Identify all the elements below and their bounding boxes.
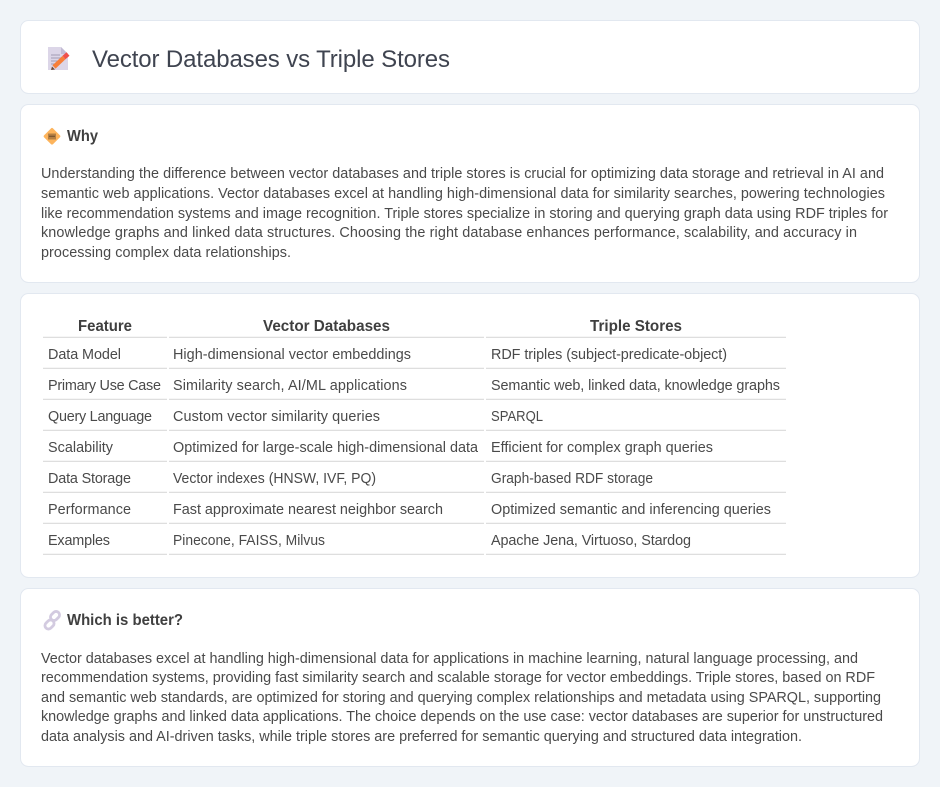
row: examples: Examples (48, 533, 110, 549)
panel: comparison table (20, 294, 920, 578)
row: data model (48, 347, 727, 363)
row: query language: Custom vector similarity queries (173, 409, 380, 425)
row: examples: Pinecone, FAISS, Milvus (173, 533, 325, 549)
heading: which is better: Which is better? (67, 612, 183, 629)
row: scalability: Scalability (48, 440, 114, 456)
row: scalability (48, 440, 713, 456)
heading: why: Why (67, 128, 98, 145)
row: data model: High-dimensional vector embeddings (173, 347, 411, 363)
which is better paragraph: Vector databases excel at handling high-dimensional data for applications in machine learning, natural language processing, and (41, 651, 858, 667)
row: performance (48, 502, 771, 518)
row: examples: Apache Jena, Virtuoso, Stardog (491, 533, 691, 549)
row: data storage: Data Storage (48, 471, 131, 487)
which is better paragraph: recommendation systems, providing fast similarity search and scalable storage for vector embeddings. Triple stores, based on RDF (41, 670, 875, 686)
row: performance: Fast approximate nearest neighbor search (173, 502, 443, 518)
table header: Triple Stores (590, 318, 682, 335)
row: data model: RDF triples (subject-predicate-object) (491, 347, 727, 363)
why paragraph: processing complex data relationships. (41, 245, 291, 261)
table header: Vector Databases (263, 318, 390, 335)
panel: why (20, 104, 920, 282)
why paragraph (41, 166, 888, 261)
row: data storage (48, 471, 653, 487)
row: query language: SPARQL (491, 409, 543, 425)
row: query language (48, 409, 543, 425)
why paragraph: knowledge graphs and linked data structures. Choosing the right database enhances performance, scalability, and accuracy in (41, 225, 857, 241)
row: primary use case (48, 378, 780, 394)
which is better paragraph (41, 651, 883, 745)
row: data model: Data Model (48, 347, 121, 363)
row: examples (48, 533, 691, 549)
row: scalability: Optimized for large-scale high-dimensional data (173, 440, 478, 456)
row: data storage: Vector indexes (HNSW, IVF, PQ) (173, 471, 376, 487)
table header (78, 318, 682, 335)
which is better paragraph: knowledge graphs and linked data applications. The choice depends on the use case: vector databases are superior for unstructured (41, 709, 883, 725)
row: primary use case: Similarity search, AI/ML applications (173, 378, 407, 394)
row: primary use case: Primary Use Case (48, 378, 161, 394)
icon: orange diamond sign (43, 127, 61, 145)
why paragraph: like recommendation systems and image recognition. Triple stores specialize in storing and querying graph data using RDF triples for (41, 206, 888, 222)
why paragraph: Understanding the difference between vector databases and triple stores is crucial for optimizing data storage and retrieval in AI and (41, 166, 884, 182)
row: performance: Performance (48, 502, 131, 518)
panel: which is better (20, 588, 920, 766)
row: scalability: Efficient for complex graph queries (491, 440, 713, 456)
row: query language: Query Language (48, 409, 152, 425)
row: performance: Optimized semantic and inferencing queries (491, 502, 771, 518)
row: primary use case: Semantic web, linked data, knowledge graphs (491, 378, 780, 394)
icon: document with pencil (48, 47, 68, 70)
icon: link (43, 610, 61, 631)
table header: Feature (78, 318, 132, 335)
which is better paragraph: and semantic web standards, are optimized for storing and querying complex relationships and metadata using SPARQL, supporting (41, 690, 881, 706)
title text: Vector Databases vs Triple Stores (92, 46, 450, 73)
panel: title (20, 20, 920, 94)
why paragraph: semantic web applications. Vector databases excel at handling high-dimensional data for similarity searches, powering technologies (41, 186, 885, 202)
which is better paragraph: data analysis and AI-driven tasks, while triple stores are preferred for semantic querying and structured data integration. (41, 729, 802, 745)
row: data storage: Graph-based RDF storage (491, 471, 653, 487)
